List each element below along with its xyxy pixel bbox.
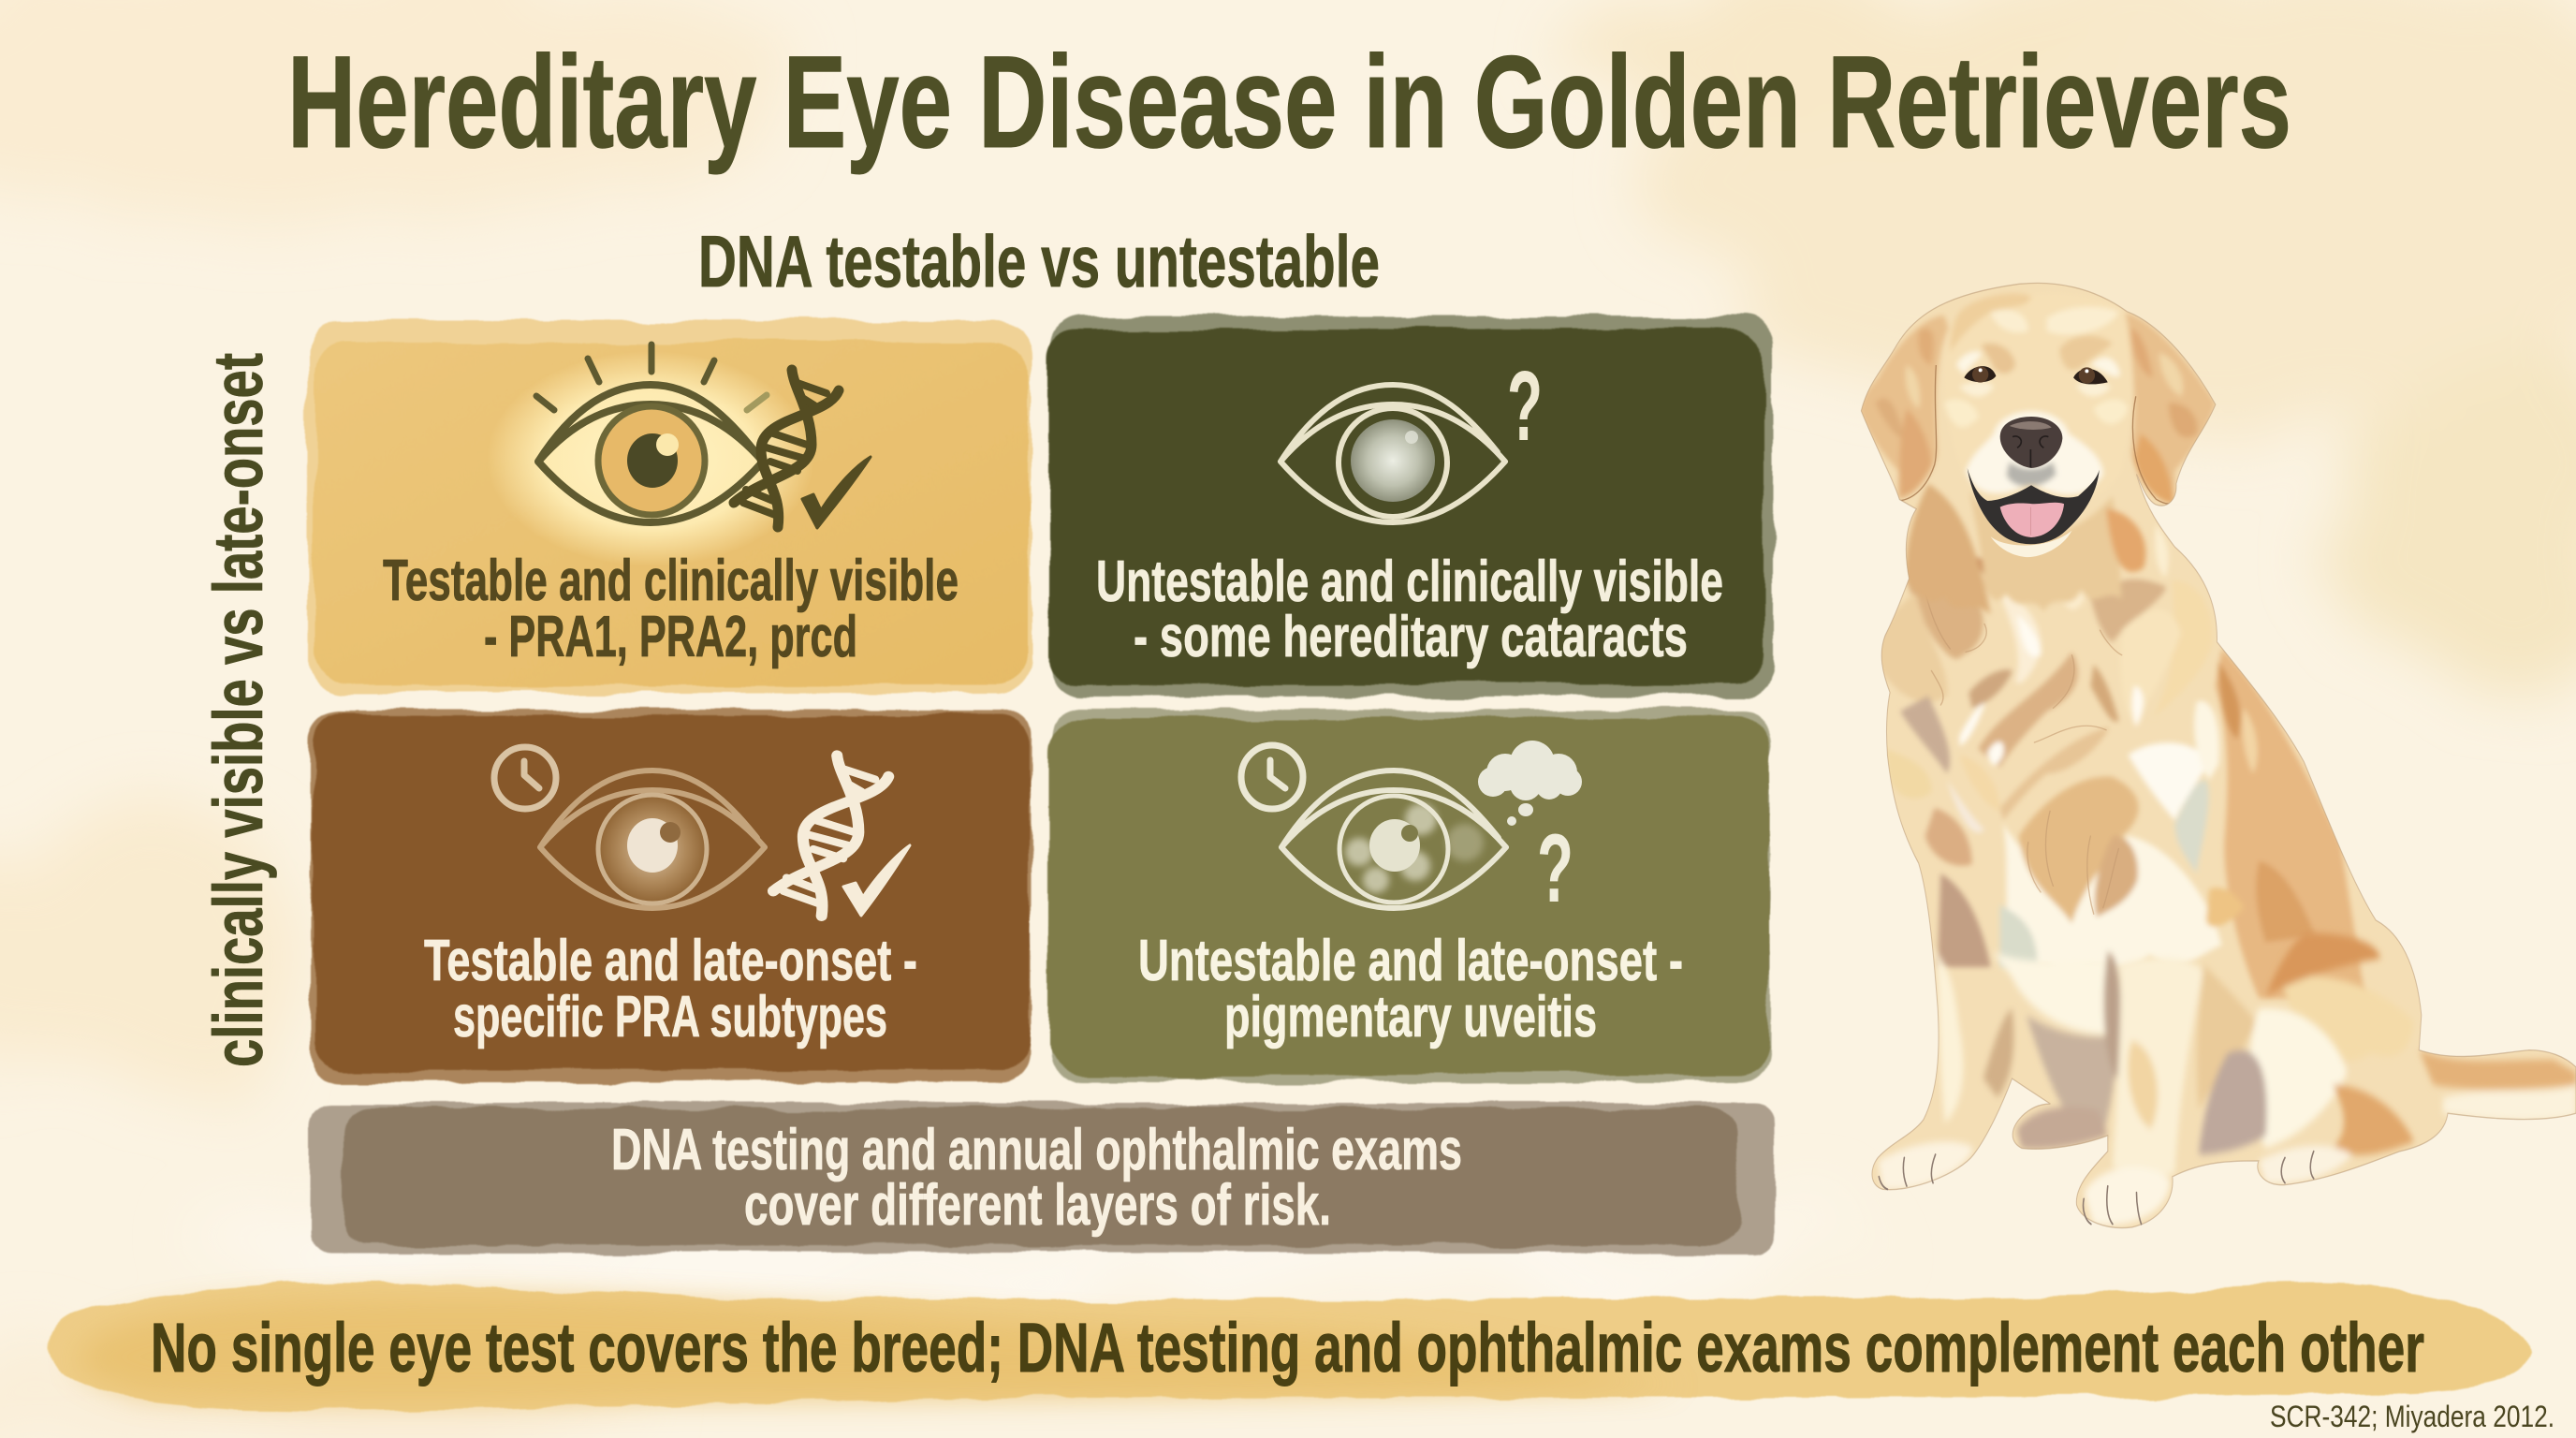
label: untestable and late-onset (1138, 929, 1683, 1049)
nose (2000, 417, 2062, 468)
icon: bright eye with rays (536, 345, 767, 522)
panel: untestable and late-onset (1048, 710, 1771, 1082)
label: untestable and clinically visible: Untestable and clinically visible (1096, 550, 1723, 614)
label: testable and late-onset: specific PRA subtypes (453, 985, 887, 1049)
skull (1943, 293, 2131, 512)
icon: question mark: ? (1507, 351, 1543, 462)
mouth (1968, 468, 2100, 544)
label: testable and clinically visible: Testable and clinically visible (383, 549, 959, 613)
banner: key takeaway (46, 1283, 2530, 1410)
label: untestable and clinically visible (1096, 550, 1723, 669)
label: untestable and late-onset: Untestable and late-onset - (1138, 929, 1683, 993)
icon: clock (494, 747, 556, 809)
label: untestable and clinically visible: - some hereditary cataracts (1134, 605, 1688, 669)
heading: vertical axis: clinically visible vs late-onset (199, 353, 277, 1067)
icon: hazy eye with uveitis (1281, 770, 1506, 908)
icon: check mark (802, 457, 871, 528)
label: testable and clinically visible (383, 549, 959, 669)
neck ruff (1906, 484, 1991, 615)
illustration: golden retriever (1825, 262, 2576, 1255)
icon: question mark: ? (1537, 814, 1573, 923)
icon: cloudy eye (1281, 385, 1505, 522)
label: untestable and late-onset: pigmentary uveitis (1224, 985, 1597, 1049)
text: band message (611, 1118, 1462, 1238)
icon: DNA helix (734, 370, 839, 527)
icon: clock (1241, 745, 1303, 809)
panel: testable and clinically visible (307, 320, 1032, 693)
label: testable and late-onset (424, 929, 917, 1049)
panel: testable and late-onset (311, 710, 1030, 1082)
icon: DNA helix (773, 756, 888, 916)
dog outline (1861, 283, 2576, 1228)
icon: late-onset eye (540, 770, 765, 908)
eyes (1964, 366, 1996, 382)
dog paw toes (1879, 1152, 2314, 1225)
icon: thought cloud (1478, 741, 1582, 826)
label: testable and late-onset: Testable and late-onset - (424, 929, 917, 993)
ears (1859, 315, 1949, 499)
heading: horizontal axis: DNA testable vs untestable (698, 220, 1380, 302)
label: testable and clinically visible: - PRA1, PRA2, prcd (484, 605, 857, 669)
icon: check mark (843, 845, 910, 916)
band: DNA testing and exams (309, 1103, 1775, 1253)
text: band message: cover different layers of risk. (744, 1173, 1331, 1238)
panel: untestable and clinically visible (1048, 316, 1775, 697)
muzzle (1966, 412, 2103, 494)
text: band message: DNA testing and annual ophthalmic exams (611, 1118, 1462, 1182)
